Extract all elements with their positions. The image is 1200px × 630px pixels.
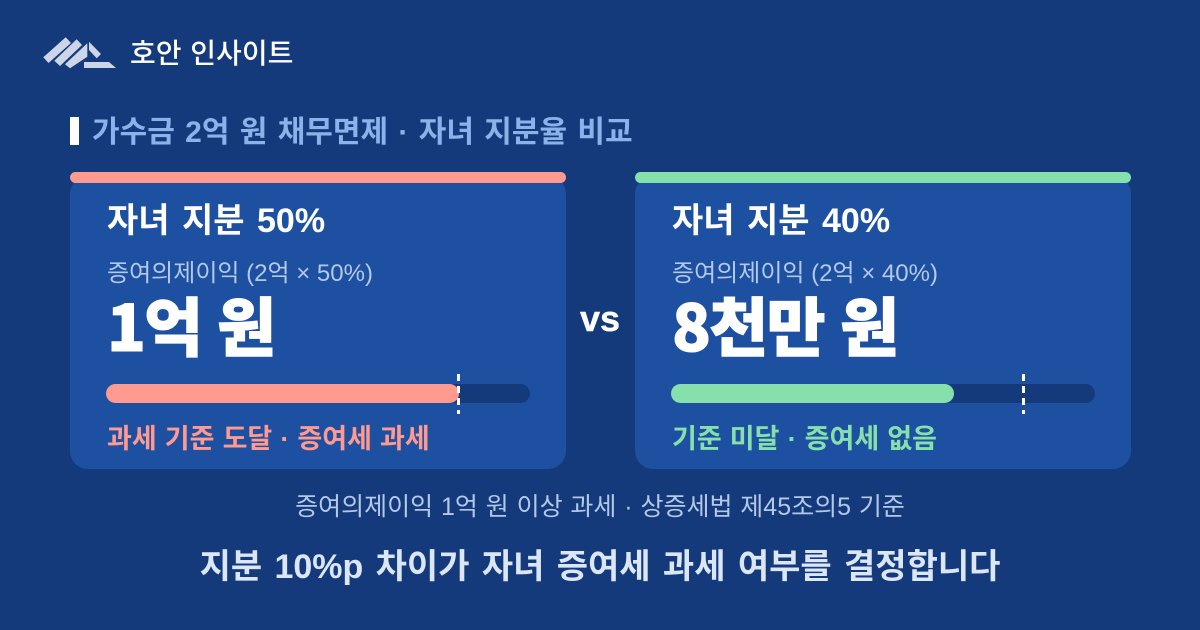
amount: 8천만 원 bbox=[672, 278, 899, 370]
amount: 1억 원 bbox=[107, 278, 276, 370]
footnote: 증여의제이익 1억 원 이상 과세 · 상증세법 제45조의5 기준 bbox=[295, 493, 905, 521]
vs label: vs bbox=[580, 298, 620, 339]
calculation label: 증여의제이익 (2억 × 50%) bbox=[107, 260, 373, 287]
logo bbox=[43, 37, 293, 69]
calculation label: 증여의제이익 (2억 × 40%) bbox=[672, 260, 938, 287]
panel: 40% share bbox=[635, 172, 1131, 469]
panel heading: 자녀 지분 40% bbox=[672, 202, 890, 240]
icon: logo mark bbox=[43, 37, 116, 68]
panel: 50% share bbox=[70, 172, 566, 469]
conclusion: 지분 10%p 차이가 자녀 증여세 과세 여부를 결정합니다 bbox=[200, 548, 1000, 586]
top accent bar bbox=[635, 172, 1131, 183]
brand name: 호안 인사이트 bbox=[130, 38, 293, 69]
top accent bar bbox=[70, 172, 566, 183]
progress bar bbox=[671, 374, 1095, 414]
status text: 기준 미달 · 증여세 없음 bbox=[672, 424, 937, 454]
panel heading: 자녀 지분 50% bbox=[107, 202, 325, 240]
status text: 과세 기준 도달 · 증여세 과세 bbox=[107, 424, 430, 454]
section heading: 가수금 2억 원 채무면제 · 자녀 지분율 비교 bbox=[92, 116, 633, 149]
progress bar bbox=[106, 374, 530, 414]
